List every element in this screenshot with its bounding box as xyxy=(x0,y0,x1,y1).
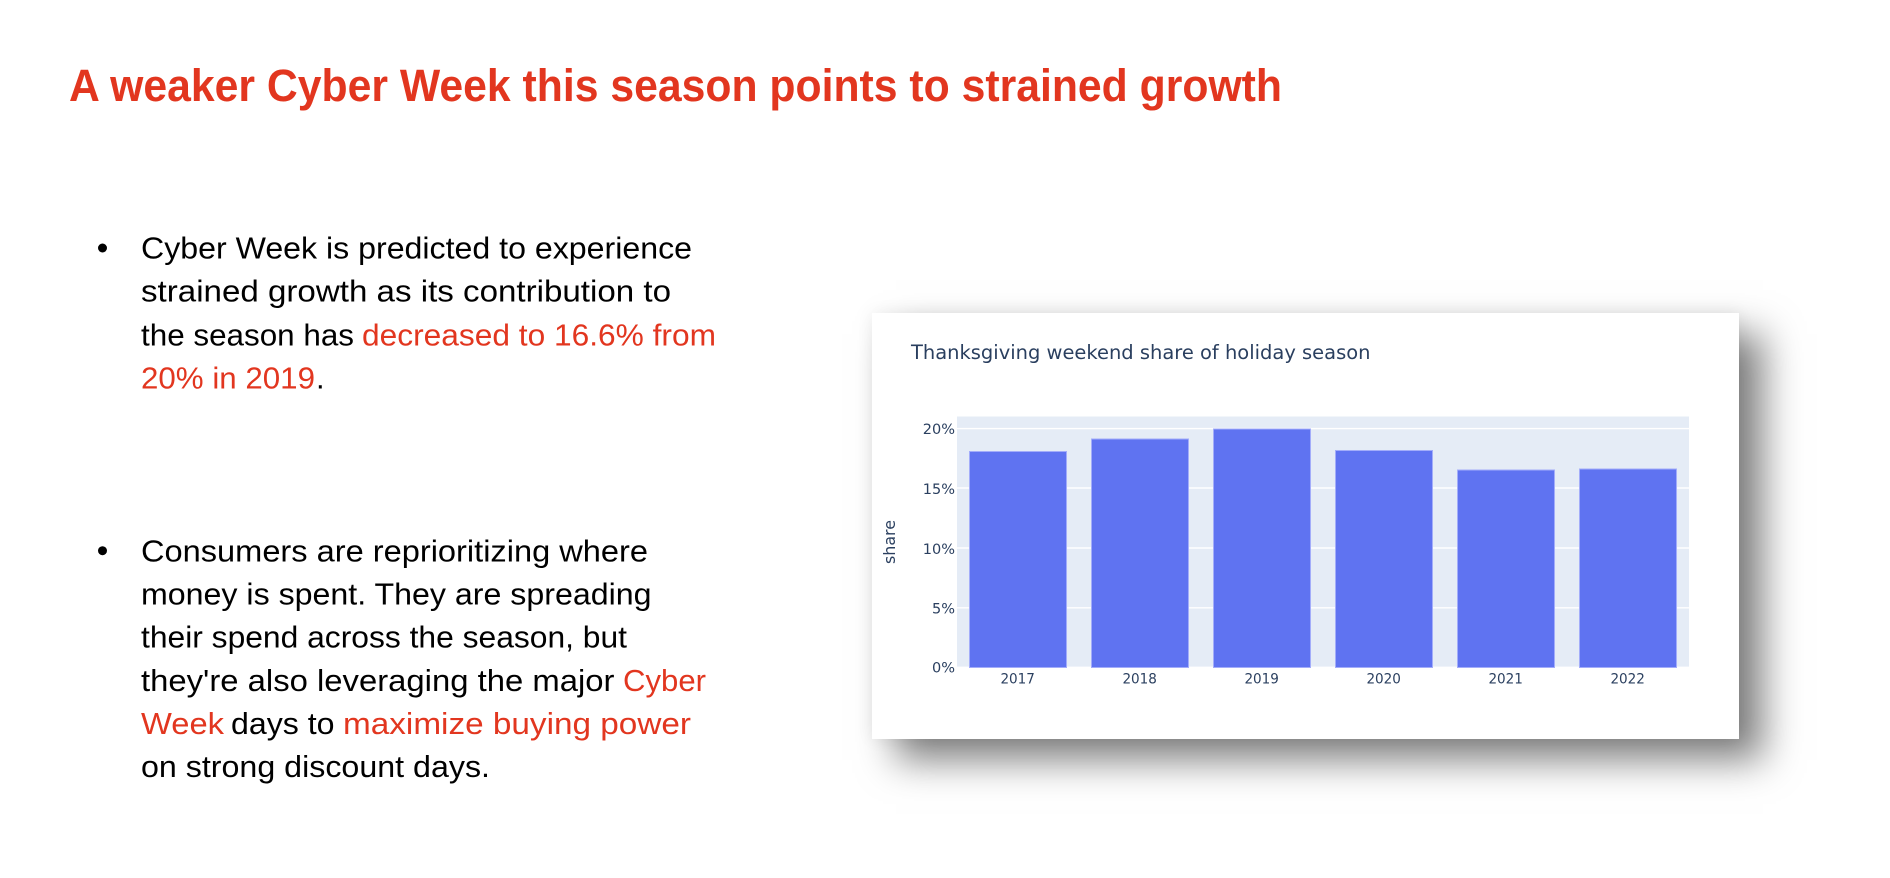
bullet block 1 xyxy=(98,230,716,396)
bullet block 2: Cyber xyxy=(623,663,706,698)
x axis tick labels: 2018 xyxy=(1122,671,1157,687)
bar 2017 xyxy=(970,452,1066,668)
bullet dot 1 xyxy=(98,244,107,252)
bullet block 2: Week xyxy=(141,706,225,741)
bar 2021 xyxy=(1458,470,1554,668)
plot area background xyxy=(957,416,1689,667)
bar 2022 xyxy=(1580,469,1676,668)
bullet block 1: decreased to 16.6% from xyxy=(362,318,716,352)
bullet block 2: days to xyxy=(231,706,334,741)
bar 2018 xyxy=(1092,439,1188,668)
x axis tick labels xyxy=(1000,671,1645,687)
bullet block 2: their spend across the season, but xyxy=(141,620,627,655)
title: A weaker Cyber Week this season points to strained growth xyxy=(69,60,1282,111)
bullet block 1: Cyber Week is predicted to experience xyxy=(141,230,692,265)
bullet block 1: 20% in 2019 xyxy=(141,360,315,396)
x axis tick labels: 2021 xyxy=(1488,671,1523,687)
y axis tick labels xyxy=(923,422,955,677)
y axis title: share xyxy=(880,520,899,564)
bullet block 1: the season has xyxy=(141,318,354,352)
bullet dot 2 xyxy=(98,546,107,555)
bullet block 2 xyxy=(98,534,706,784)
x axis tick labels: 2017 xyxy=(1000,671,1035,687)
bullet block 2: maximize buying power xyxy=(343,706,691,741)
y axis tick labels: 10% xyxy=(923,542,955,558)
y axis tick labels: 15% xyxy=(923,482,955,498)
chart title: Thanksgiving weekend share of holiday season xyxy=(910,341,1370,364)
bullet block 2: money is spent. They are spreading xyxy=(141,576,652,612)
bullet block 2: they're also leveraging the major xyxy=(141,663,614,698)
x axis tick labels: 2022 xyxy=(1610,671,1645,687)
x axis tick labels: 2020 xyxy=(1366,671,1401,687)
bullet block 1: . xyxy=(316,360,325,396)
bullet block 1: strained growth as its contribution to xyxy=(141,274,671,309)
chart card xyxy=(872,313,1739,739)
x axis tick labels: 2019 xyxy=(1244,671,1279,687)
bullet block 2: on strong discount days. xyxy=(141,749,490,784)
y axis tick labels: 20% xyxy=(923,422,955,438)
y axis tick labels: 0% xyxy=(932,661,955,677)
bullet block 2: Consumers are reprioritizing where xyxy=(141,534,648,569)
y axis tick labels: 5% xyxy=(932,602,955,618)
bar series xyxy=(970,429,1676,668)
bar 2019 xyxy=(1214,429,1310,668)
bar 2020 xyxy=(1336,450,1432,668)
